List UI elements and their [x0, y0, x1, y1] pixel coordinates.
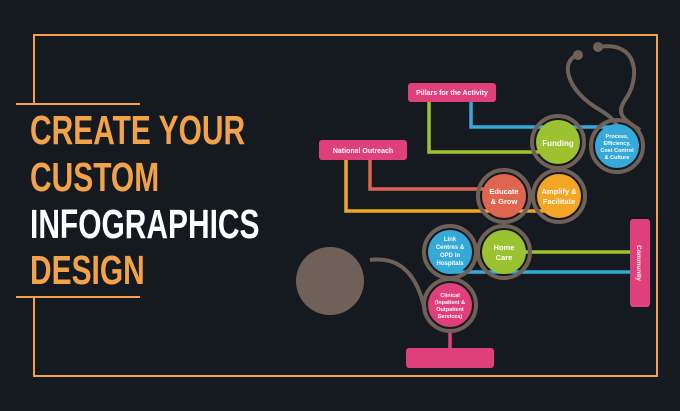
circles: Outpatient	[436, 307, 464, 313]
title: CUSTOM	[30, 154, 159, 200]
stethoscope	[370, 46, 643, 331]
circles: Care	[496, 253, 512, 262]
title	[30, 107, 259, 293]
frame	[16, 35, 657, 376]
circles: Process,	[606, 134, 629, 140]
circles: Home	[494, 243, 514, 252]
circles: Funding	[542, 139, 574, 148]
connector lines	[346, 101, 630, 350]
circles: Facilitate	[543, 197, 575, 206]
circles: Centres &	[436, 245, 465, 251]
labels boxes	[319, 83, 650, 368]
circles: Educate	[489, 187, 519, 196]
circles: & Grow	[491, 197, 517, 206]
circles: Amplify &	[541, 187, 577, 196]
labels boxes: Pillars for the Activity	[416, 90, 488, 97]
circles: Cost Control	[600, 148, 634, 154]
circles: & Culture	[605, 155, 629, 161]
labels boxes: Community	[635, 245, 642, 281]
title: INFOGRAPHICS	[30, 201, 259, 247]
title: CREATE YOUR	[30, 107, 245, 153]
title: DESIGN	[30, 247, 145, 293]
icon: brown chest piece	[296, 247, 364, 315]
labels boxes: National Outreach	[333, 148, 393, 155]
circles: (Inpatient &	[435, 300, 465, 306]
circles: Hospitals	[436, 261, 464, 267]
circles: Clinical	[440, 293, 460, 299]
circles: OPD in	[440, 253, 460, 259]
circles	[428, 120, 639, 327]
circles: Link	[444, 237, 457, 243]
circles: Services)	[438, 314, 462, 320]
circles: Efficiency,	[603, 141, 631, 147]
